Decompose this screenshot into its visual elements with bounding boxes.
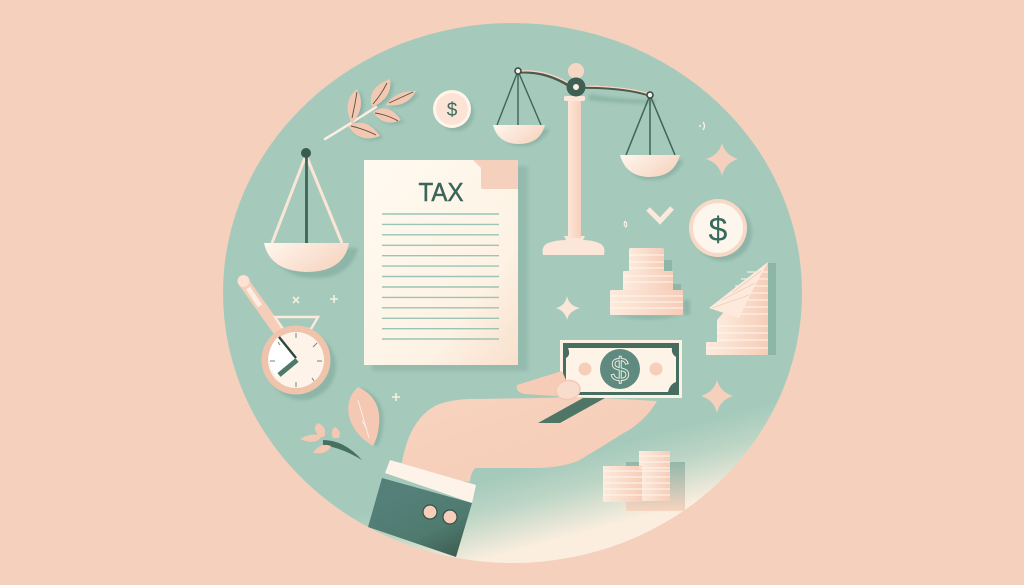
left hanging scale <box>264 148 358 278</box>
beam <box>518 72 650 95</box>
hand shape <box>517 371 566 396</box>
small dollar coin <box>433 90 474 131</box>
palm crease <box>538 398 605 423</box>
large dollar coin: $ <box>709 211 728 249</box>
teal circle <box>223 23 802 563</box>
scale shadows <box>498 94 684 180</box>
document text lines <box>382 214 499 339</box>
small coin stacks lower right <box>603 451 685 511</box>
balance scale <box>493 63 684 255</box>
document corner fold <box>473 160 518 189</box>
shirt cuff <box>385 460 476 503</box>
sleeve <box>368 478 472 557</box>
large dollar coin <box>689 199 752 261</box>
hand holding banknote <box>368 340 682 557</box>
TAX title: TAX <box>418 177 464 207</box>
leaf sprig top left <box>325 79 419 140</box>
coin stack <box>610 248 690 320</box>
tax document <box>364 160 528 371</box>
small dollar coin: $ <box>447 100 458 121</box>
left pan strings and pan <box>497 71 541 125</box>
thumb <box>555 379 581 401</box>
banknote: $ <box>611 351 629 388</box>
right pan strings and pan <box>626 95 675 155</box>
leaf <box>348 387 383 447</box>
small plant <box>300 423 362 460</box>
sparkles and small marks <box>293 122 738 413</box>
banknote <box>560 340 682 398</box>
folded paper pile <box>706 262 776 355</box>
cuff buttons <box>423 505 457 524</box>
stopwatch <box>238 275 336 400</box>
pillar and base <box>543 236 604 255</box>
